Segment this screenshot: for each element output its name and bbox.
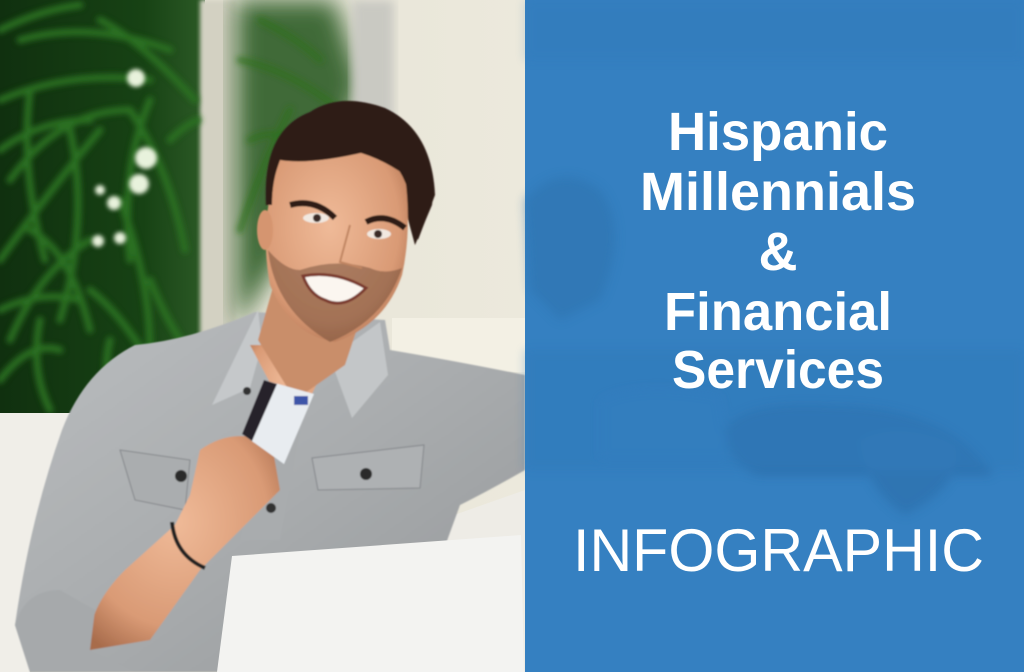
shirt collar and placket <box>120 310 424 540</box>
stubble beard <box>268 250 402 342</box>
man <box>15 101 525 672</box>
background: green plants <box>0 0 394 415</box>
bracelet <box>172 522 205 568</box>
arm holding card <box>89 436 280 650</box>
hair back <box>267 103 433 245</box>
shirt <box>15 312 525 672</box>
sofa <box>0 413 75 672</box>
eyebrows and eyes <box>290 203 405 239</box>
neck <box>258 280 370 400</box>
panel: blue title panel <box>525 0 1024 672</box>
ear <box>257 210 273 250</box>
title: Financial <box>664 282 892 342</box>
nose <box>340 225 362 268</box>
credit card <box>242 380 314 464</box>
title: & <box>758 222 798 282</box>
hair top <box>266 101 435 240</box>
subtitle: INFOGRAPHIC <box>573 517 984 584</box>
face <box>266 148 408 342</box>
panel: photo of smiling man holding a credit card <box>0 0 525 672</box>
title: Millennials <box>640 162 916 222</box>
faint background photo shapes <box>525 0 1024 515</box>
background: wall panel <box>392 318 525 372</box>
laptop <box>217 535 524 672</box>
title: Hispanic <box>668 102 888 162</box>
title: Services <box>672 340 884 400</box>
title <box>640 102 916 400</box>
smile <box>303 274 366 303</box>
rolled sleeve <box>15 590 135 672</box>
